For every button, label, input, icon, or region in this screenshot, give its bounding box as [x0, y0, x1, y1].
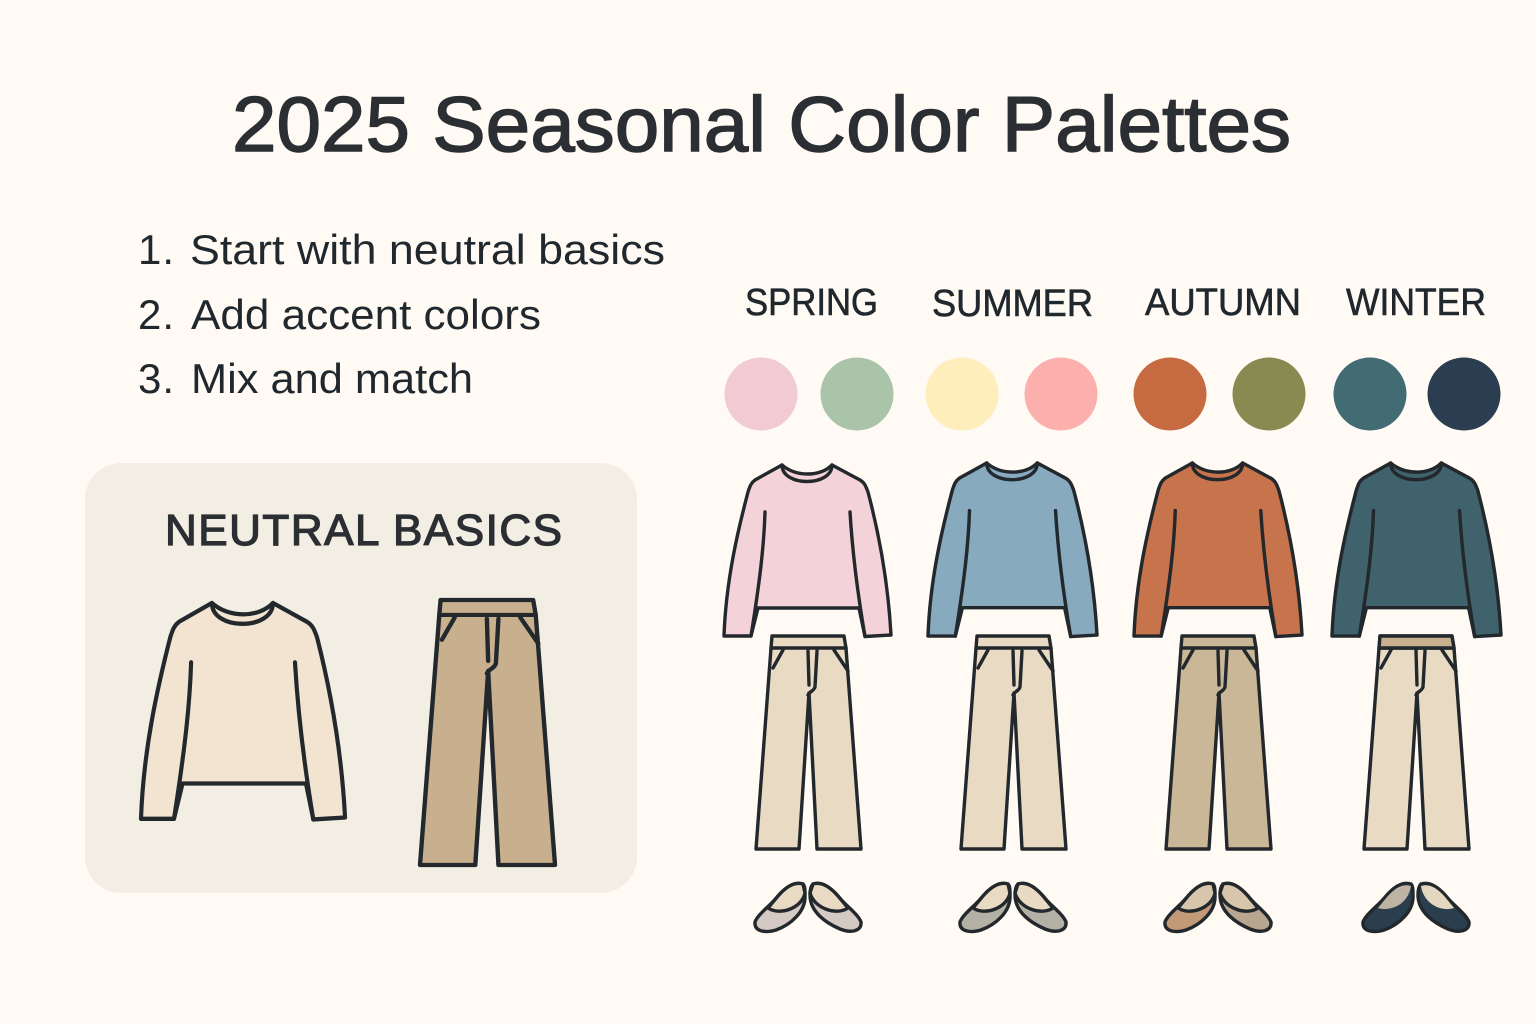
outfit: spring [724, 465, 891, 931]
swatch: winter teal [1334, 358, 1406, 430]
outfit: summer [928, 463, 1097, 931]
swatch: spring pink [724, 358, 798, 430]
outfit: autumn [1134, 463, 1302, 931]
winter sweater [1332, 463, 1501, 637]
winter pants [1364, 636, 1469, 849]
label: winter: WINTER [1346, 282, 1486, 324]
colour swatches [724, 358, 1500, 430]
autumn shoes [1165, 883, 1271, 931]
swatch: autumn orange [1134, 358, 1206, 430]
panel heading: NEUTRAL BASICS [165, 506, 562, 555]
neutral pants [420, 600, 555, 865]
step 1: Start with neutral basics [190, 226, 665, 273]
winter shoes [1363, 883, 1469, 931]
spring pants [756, 636, 861, 849]
numbered steps [138, 226, 665, 402]
spring sweater [724, 465, 891, 636]
swatch: summer coral [1024, 358, 1098, 430]
swatch: summer yellow [926, 358, 998, 430]
season labels [745, 282, 1486, 325]
swatch: spring green [820, 358, 894, 430]
label: spring: SPRING [745, 282, 878, 324]
spring shoes [755, 883, 861, 931]
panel background [85, 463, 637, 893]
title: 2025 Seasonal Color Palettes [232, 80, 1291, 168]
step 1: 1. [138, 226, 174, 273]
label: autumn: AUTUMN [1145, 282, 1301, 324]
swatch: autumn olive [1232, 358, 1306, 430]
summer sweater [928, 463, 1097, 637]
autumn sweater [1134, 463, 1302, 637]
step 2: Add accent colors [191, 291, 541, 338]
outfit: winter [1332, 463, 1501, 931]
summer pants [961, 636, 1066, 849]
summer shoes [960, 883, 1066, 931]
label: summer: SUMMER [932, 283, 1093, 325]
panel: neutral basics [85, 463, 637, 893]
autumn pants [1166, 636, 1271, 849]
neutral sweater [141, 603, 345, 819]
step 3: Mix and match [191, 355, 473, 402]
step 2: 2. [138, 291, 174, 338]
step 3: 3. [138, 355, 174, 402]
swatch: winter navy [1428, 358, 1500, 430]
